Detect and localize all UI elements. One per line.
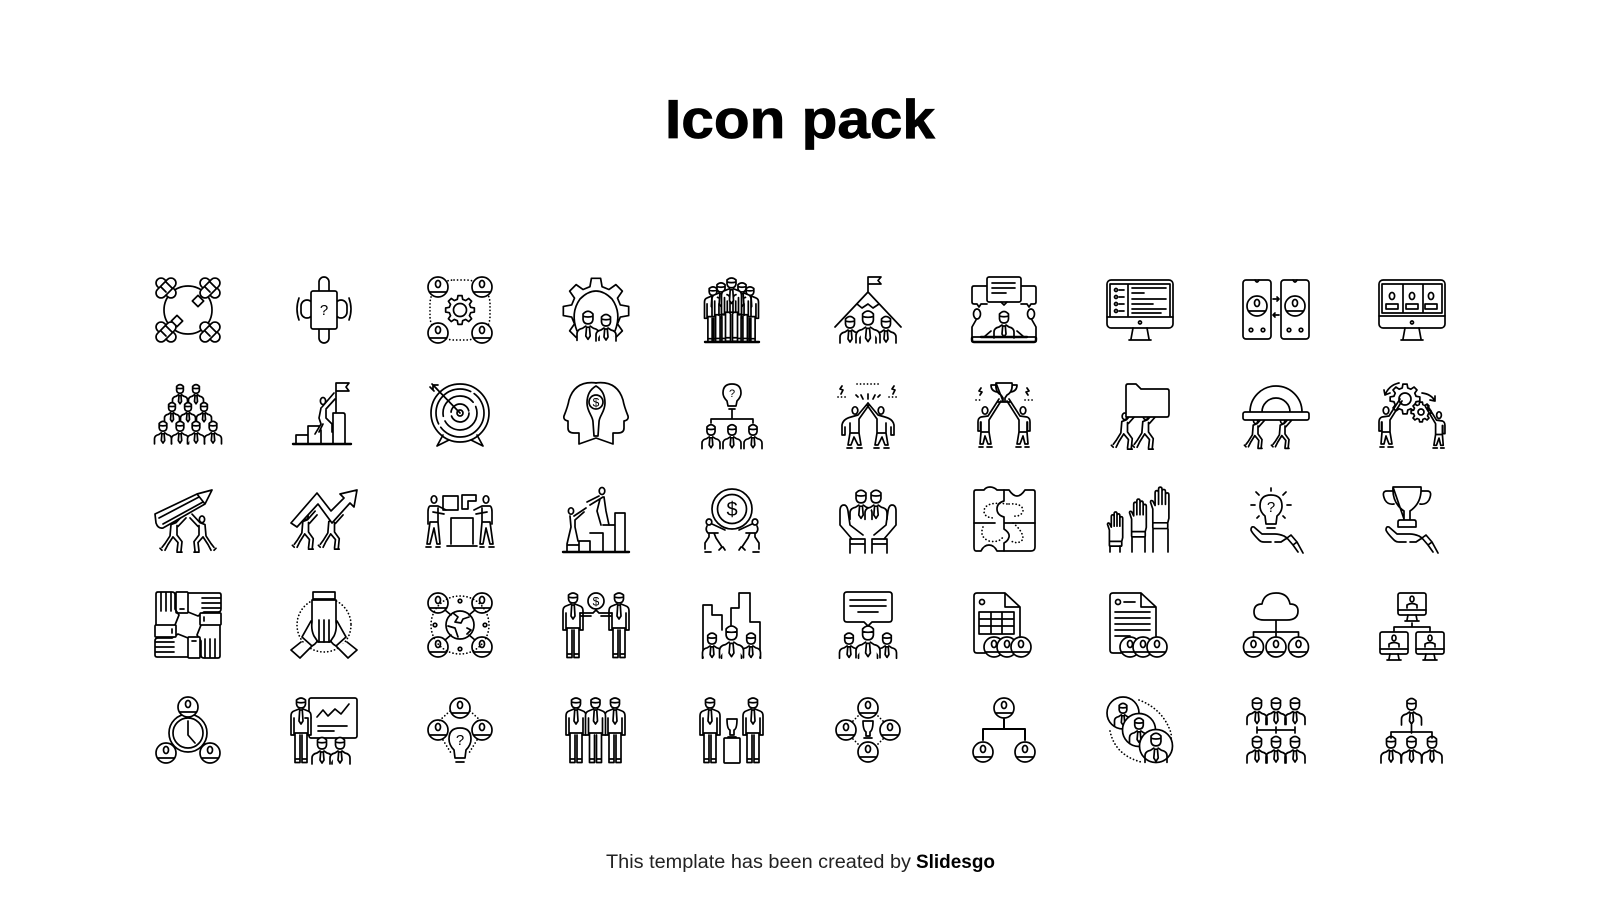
icon: carrying folder	[1111, 384, 1169, 449]
icon: people building blocks	[426, 495, 494, 547]
icon: holding trophy	[976, 383, 1033, 447]
icon: mountain flag team	[835, 277, 901, 343]
title: Icon pack	[665, 88, 935, 150]
icon: carrying protractor	[1243, 386, 1309, 448]
icon: hand with idea	[1251, 488, 1303, 553]
icon: meeting question	[297, 277, 351, 343]
icon: people with gears	[1379, 383, 1445, 448]
icon: presentation	[291, 698, 357, 764]
icon: climbing bar chart	[563, 488, 629, 552]
icon: raised hands	[1108, 487, 1169, 552]
icon: crowd	[704, 278, 759, 342]
icon: avatar org tree	[973, 698, 1035, 762]
icon: puzzle	[974, 487, 1035, 551]
icon: two men with coin: $	[593, 594, 600, 608]
icon: team speech bubble	[840, 592, 896, 658]
icon: team pyramid	[154, 385, 222, 444]
icon: team idea	[428, 698, 492, 762]
icon: two heads with money bulb: $	[593, 396, 600, 410]
icon: spreadsheet team	[974, 593, 1031, 657]
icon: hands holding team	[840, 490, 896, 553]
icon: gear team	[563, 278, 629, 345]
icon: connected monitors	[1380, 593, 1444, 660]
icon: trophy team diamond	[836, 698, 900, 762]
icon: hand with idea: ?	[1267, 499, 1275, 516]
icon: meeting question: ?	[320, 302, 328, 319]
icon: three hands	[291, 592, 357, 658]
icon: carrying pencil	[155, 490, 216, 552]
icon: global network	[428, 593, 492, 657]
icon: monitor list	[1107, 280, 1173, 340]
icon: idea team tree: ?	[729, 388, 735, 400]
icon: carrying coin: $	[726, 499, 738, 521]
icon: two team rows	[1247, 698, 1305, 763]
icon: meeting chat	[972, 277, 1036, 342]
icon: clock team	[156, 697, 220, 763]
icon: two men with trophy podium	[700, 698, 763, 763]
icon: document team	[1110, 593, 1167, 657]
footer credit: Slidesgo	[916, 852, 995, 873]
icon: climbing steps flag	[293, 383, 351, 444]
icon: four hands	[155, 592, 221, 658]
icon: two men with coin	[563, 593, 629, 658]
icon: carrying growth arrow	[291, 490, 357, 549]
icon: team bar chart	[702, 593, 760, 658]
icon: avatars with gear	[428, 277, 492, 343]
icon: target arrow	[430, 384, 489, 446]
icon: hand with trophy	[1383, 487, 1438, 553]
icon: phones exchange	[1243, 280, 1309, 339]
icon: overlapping team circles	[1107, 697, 1172, 762]
icon: linked circle	[154, 276, 222, 344]
icon: carrying coin	[705, 489, 759, 552]
icon: leader team tree	[1381, 698, 1442, 763]
icon: two heads with money bulb	[564, 383, 628, 444]
icon: three men	[566, 698, 625, 762]
icon: idea team tree	[702, 384, 762, 449]
footer credit: This template has been created by	[606, 852, 912, 873]
icon: cloud network	[1244, 593, 1308, 657]
icon: monitor video call	[1379, 280, 1445, 340]
icon grid	[154, 276, 1445, 764]
icon: high five	[838, 384, 899, 448]
icon: team idea: ?	[456, 732, 464, 749]
